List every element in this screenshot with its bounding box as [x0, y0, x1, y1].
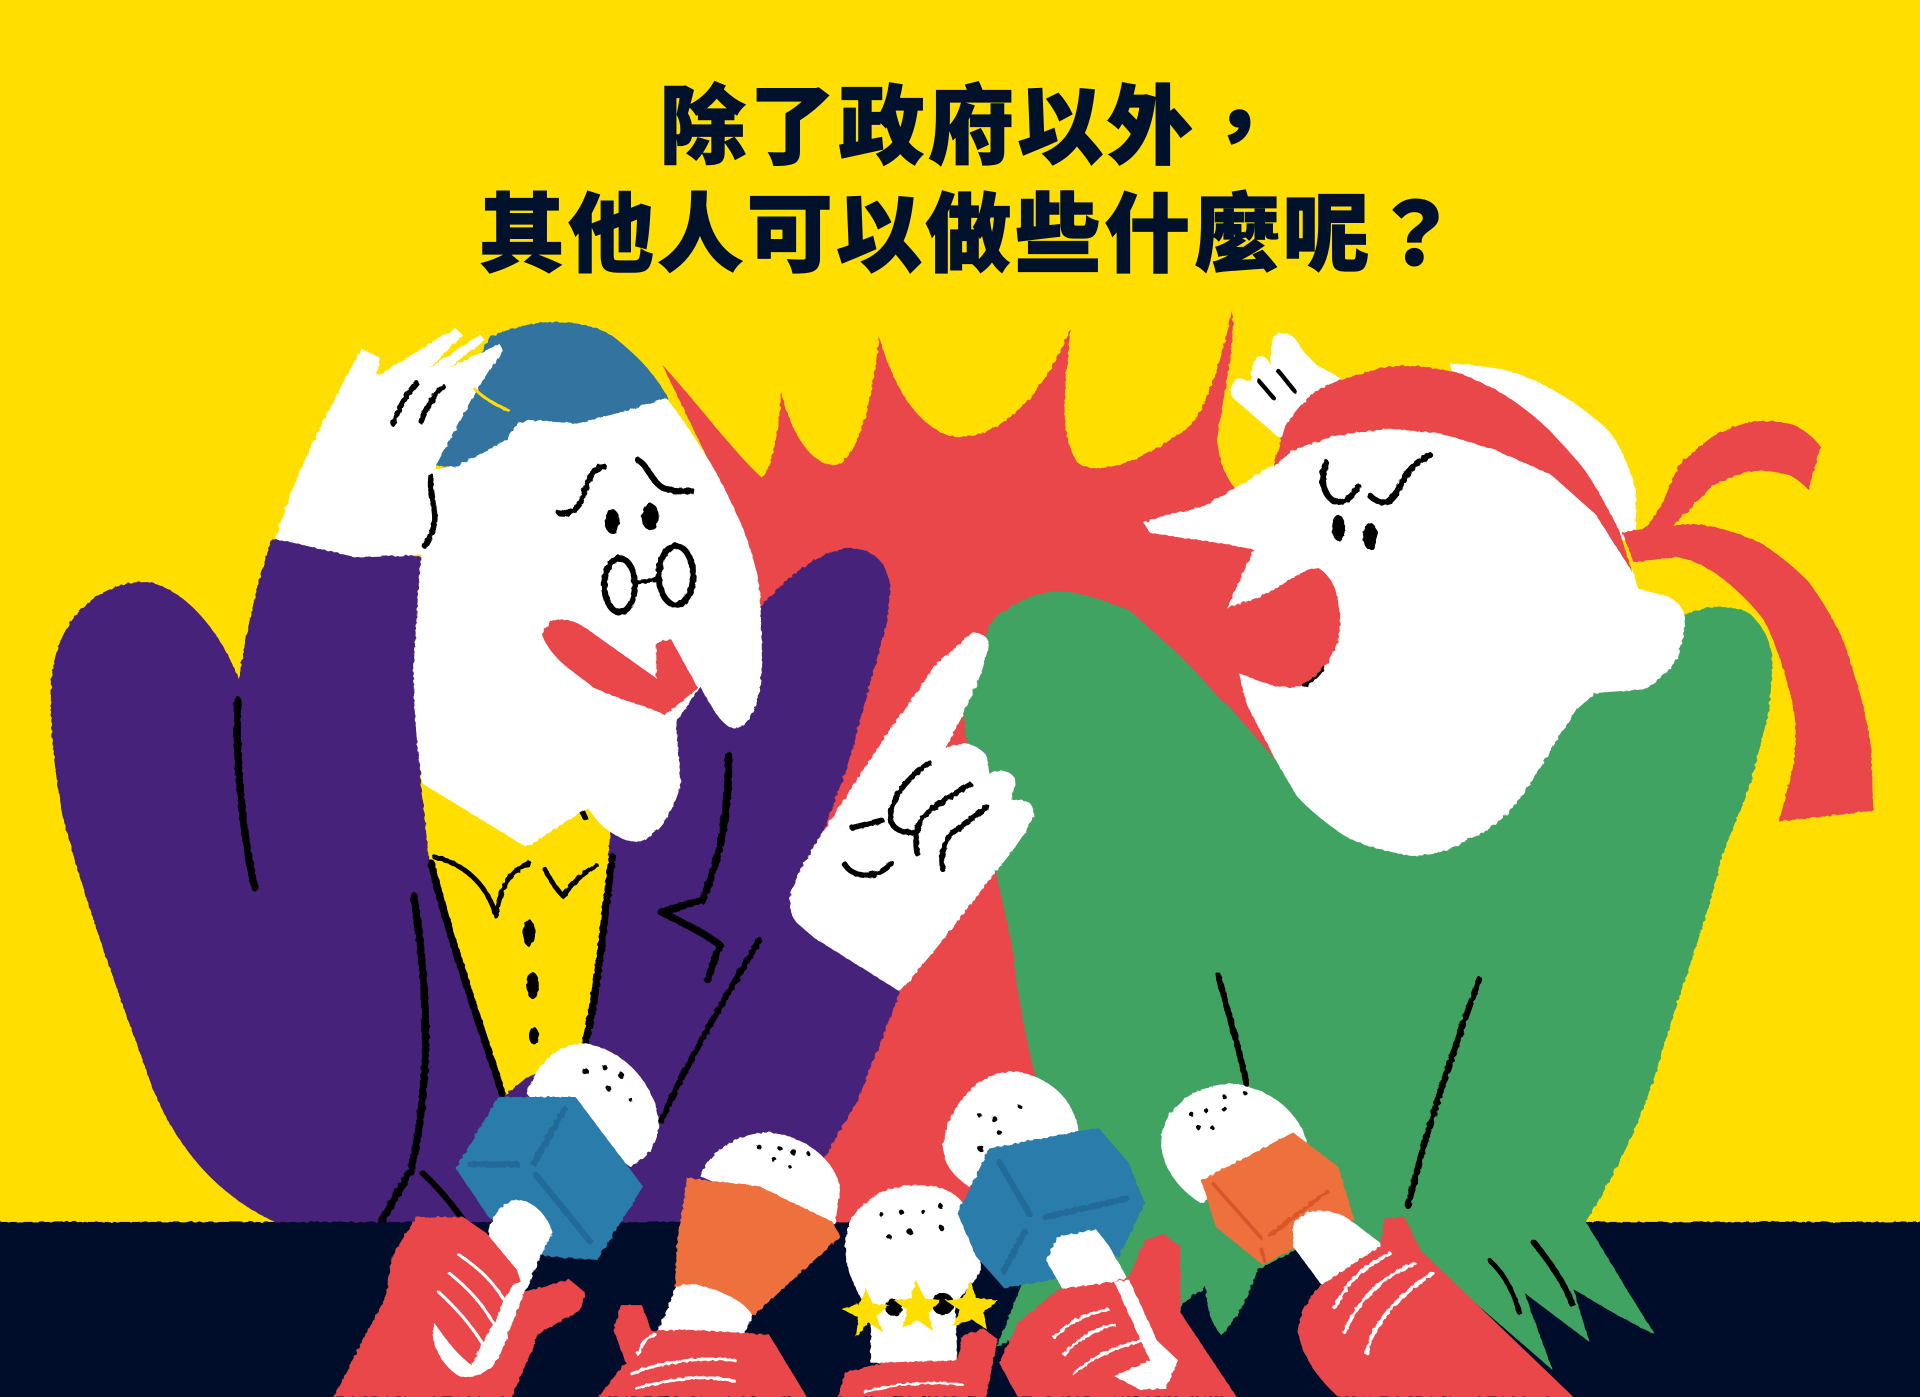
blue cap	[436, 322, 669, 468]
green crease lines	[1218, 976, 1572, 1313]
navy table band	[0, 1222, 1920, 1397]
hand finger marks	[1259, 371, 1294, 398]
white headwrap back	[1450, 364, 1636, 545]
black openings between stars	[885, 1293, 954, 1316]
cap highlight	[475, 389, 508, 410]
hand holding microphone 2	[598, 1305, 807, 1397]
hand holding microphone 1	[333, 1217, 585, 1397]
purple suit	[51, 539, 900, 1228]
mouth	[542, 619, 698, 715]
microphone 3: star-badged, centre	[838, 1185, 998, 1397]
three yellow stars	[841, 1279, 998, 1337]
microphone 2: orange, centre left	[598, 1133, 840, 1397]
head with long nose	[1144, 429, 1685, 856]
head	[414, 398, 762, 847]
microphone 5: orange, right	[1161, 1084, 1573, 1397]
title	[479, 80, 1462, 283]
pointing hand	[790, 633, 1034, 992]
hand holding microphone 5	[1298, 1217, 1573, 1397]
mouth shadow line	[1304, 667, 1324, 686]
green body	[964, 591, 1772, 1370]
figure: right man in green	[964, 333, 1873, 1370]
face: brows, eyes and glasses	[560, 460, 693, 612]
headband ribbon tails	[1622, 421, 1873, 822]
microphone 4: blue, centre right	[943, 1071, 1237, 1397]
title: 除了政府以外，	[660, 80, 1286, 176]
shouting mouth	[1175, 568, 1340, 704]
small raised hand	[1231, 333, 1359, 447]
title: 其他人可以做些什麼呢？	[479, 187, 1462, 283]
illustration: two arguing figures and microphones	[0, 311, 1920, 1397]
figure: left man in purple suit	[51, 322, 900, 1228]
red shout burst	[662, 311, 1298, 1228]
red headband	[1273, 366, 1632, 572]
raised hand	[276, 328, 503, 557]
hand holding microphone 3	[838, 1328, 998, 1397]
face: eyes and brows	[1323, 455, 1430, 550]
vest buttons	[523, 919, 539, 1044]
suit crease lines	[237, 700, 759, 1228]
hand holding microphone 4	[999, 1234, 1237, 1397]
yellow vest	[420, 735, 618, 1096]
finger and ear marks	[393, 383, 443, 546]
microphone 1: blue, left	[333, 1043, 659, 1397]
pointing hand finger marks	[845, 763, 987, 875]
